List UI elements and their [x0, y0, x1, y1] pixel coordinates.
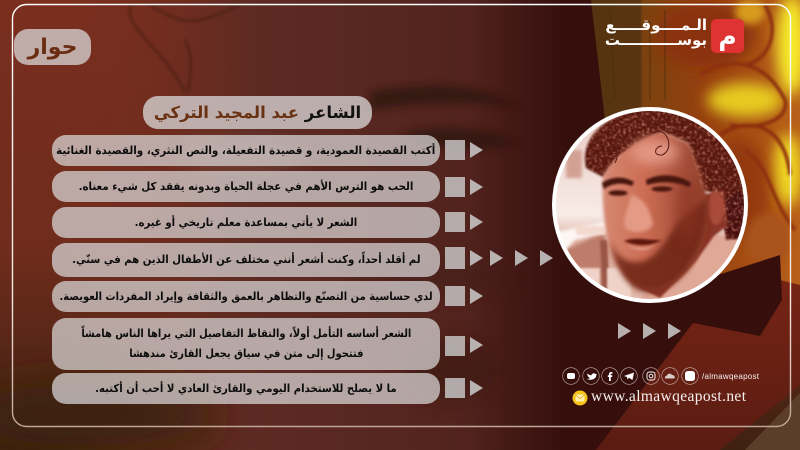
quote 6: فتتحول إلى متن في سياق يجعل القارئ مندهشا: [129, 347, 363, 360]
quote 1: [52, 135, 440, 166]
forehead highlight: [631, 139, 679, 165]
brows: [602, 178, 634, 189]
yellow hair region: [590, 0, 800, 320]
quote 2: الحب هو الترس الأهم في عجلة الحياة وبدونه يفقد كل شيء معناه.: [79, 180, 413, 192]
icon: logo mark: م: [718, 22, 737, 50]
quote 3: [52, 207, 440, 238]
lower right shapes: [585, 280, 800, 450]
logo wordmark: الـمــــوقـــــع: [605, 16, 707, 34]
triangles under portrait: [618, 323, 681, 339]
logo wordmark: بوســـــــــــت: [605, 31, 707, 49]
eyes: [608, 190, 628, 196]
hair strands top: [130, 5, 240, 92]
logo: al-Mawqea Post: [605, 16, 744, 53]
quote 3: الشعر لا يأتي بمساعدة معلم تاريخي أو غيره.: [135, 216, 357, 228]
icon: soundcloud: [665, 374, 675, 378]
icon: telegram: [624, 372, 634, 380]
face: [603, 132, 708, 290]
icon: logo mark: [711, 19, 744, 53]
nose: [624, 195, 653, 232]
quote 4: لم أقلد أحداً، وكنت أشعر أنني مختلف عن الأطفال الذين هم في سنّي.: [72, 253, 420, 266]
icon: instagram: [647, 372, 655, 380]
quote 2: [52, 171, 440, 202]
curly hair texture: [585, 111, 744, 240]
quote 6: الشعر أساسه التأمل أولاً، والتقاط التفاصيل التي يراها الناس هامشاً: [81, 327, 411, 340]
icon: twitter: [587, 373, 597, 380]
quote 6: [52, 318, 440, 370]
icon: facebook: [608, 372, 612, 381]
website: www.almawqeapost.net: [591, 388, 747, 405]
quote 5: [52, 281, 440, 312]
quote 5: لدي حساسية من التصنّع والتظاهر بالعمق والثقافة وإيراد المفردات العويصة.: [59, 290, 433, 302]
category tag: [14, 29, 91, 65]
mouth: [624, 239, 662, 245]
title pill: الشاعر عبد المجيد التركي: [154, 103, 361, 122]
icon: site: [685, 371, 695, 381]
quote 4: [52, 243, 440, 277]
title pill: [143, 96, 372, 129]
neck and ear: [640, 190, 728, 298]
bullet markers: [445, 140, 553, 398]
quote 7: ما لا يصلح للاستخدام اليومي والقارئ العادي لا أحب أن أكتبه.: [95, 382, 397, 394]
cheek shade: [672, 182, 698, 234]
category tag: حوار: [28, 34, 77, 60]
eye and brow: [370, 86, 520, 110]
hair: [585, 108, 748, 240]
quote 7: [52, 373, 440, 404]
beard: [610, 200, 706, 292]
portrait photo: [552, 107, 748, 303]
quote 1: أكتب القصيدة العمودية، و قصيدة التفعيلة، والنص النثري، والقصيدة الغنائية: [56, 144, 436, 156]
icon: mail: [572, 390, 588, 406]
logo wordmark: [605, 16, 707, 49]
icon: youtube: [567, 373, 575, 379]
shirt: [640, 235, 737, 299]
handle: /almawqeapost: [702, 372, 760, 381]
